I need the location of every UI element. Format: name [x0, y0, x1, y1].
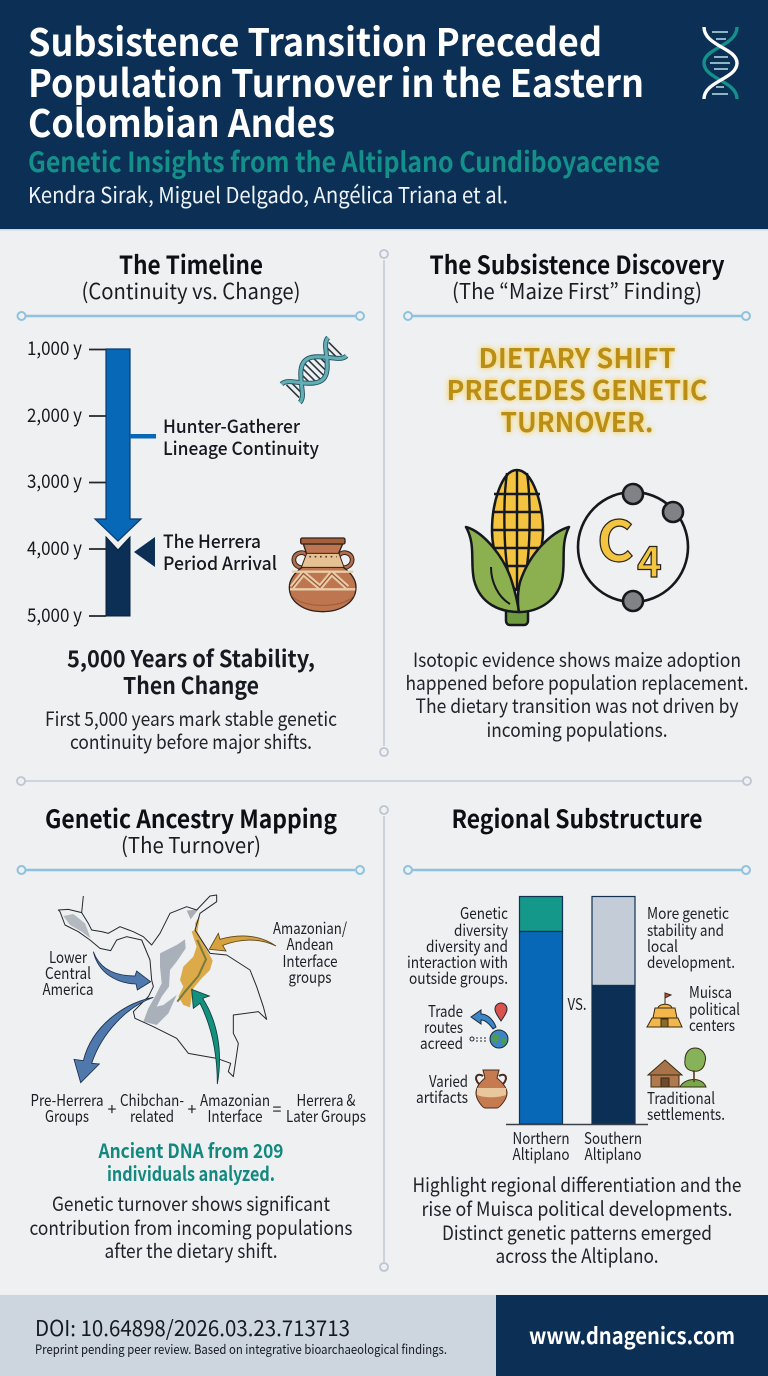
callout: dietary shift: DIETARY SHIFT — [478, 337, 676, 376]
label: varied artifacts — [416, 1068, 468, 1108]
heading: The Subsistence Discovery: The Subsistence Discovery — [430, 246, 725, 282]
preprint note: Preprint pending peer review. Based on integrative bioarchaeological findings. — [35, 1339, 447, 1358]
arrow: Amazonian inflow — [192, 989, 220, 1084]
summary heading: Then Change — [123, 667, 259, 701]
label: Hunter-Gatherer: Lineage Continuity — [163, 435, 319, 461]
label: vs: VS. — [568, 991, 586, 1015]
label: traditional settlements: Traditional — [647, 1085, 715, 1109]
axis labels: Southern — [584, 1125, 642, 1149]
title — [28, 12, 644, 148]
axis labels — [512, 1125, 642, 1165]
heading: Regional Substructure: Regional Substructure — [452, 800, 702, 836]
heading: The Subsistence Discovery — [404, 246, 750, 320]
bar: Herrera period — [106, 537, 130, 616]
title: Population Turnover in the Eastern — [28, 53, 644, 108]
body text — [30, 1188, 352, 1264]
ancestry equation: Herrera & — [296, 1087, 356, 1111]
arrow: continuity bar — [95, 349, 141, 541]
icon: settlement — [648, 1048, 706, 1087]
label: Lower Central America — [42, 944, 94, 1000]
label: Amazonian/Andean: Interface — [282, 948, 338, 972]
DOI: DOI: 10.64898/2026.03.23.713713 — [35, 1312, 350, 1343]
body text: continuity before major shifts. — [70, 726, 312, 755]
footer — [0, 1295, 768, 1376]
body text: First 5,000 years mark stable genetic — [45, 703, 337, 732]
arrow: Lower Central America inflow — [93, 952, 151, 990]
body text: across the Altiplano. — [496, 1240, 658, 1269]
label: Hunter-Gatherer: Hunter-Gatherer — [163, 413, 300, 439]
header banner — [0, 0, 768, 230]
body text — [45, 703, 337, 755]
callout: dietary shift — [446, 337, 708, 440]
arrow: Pre-Herrera outflow — [74, 997, 153, 1083]
timeline axis labels: 5,000 y — [27, 601, 82, 628]
label: Herrera — [163, 528, 277, 576]
label: Southern stability: development. — [647, 949, 735, 973]
label: trade routes: Trade — [428, 998, 463, 1022]
label: Southern stability: More genetic — [647, 900, 729, 924]
icon: DNA helix — [281, 337, 347, 403]
label: Lower Central America: Lower — [49, 944, 88, 968]
label: varied artifacts: Varied — [429, 1068, 468, 1092]
label: Amazonian/Andean: Amazonian/ — [273, 915, 348, 939]
heading: Regional Substructure — [404, 800, 750, 874]
label: trade routes: routes — [424, 1014, 463, 1038]
bar: Northern Altiplano — [520, 896, 562, 1124]
body text — [406, 644, 748, 743]
label: Northern diversity: interaction with — [407, 949, 508, 973]
ancestry equation: = — [273, 1096, 282, 1120]
label: Amazonian/Andean: Andean — [286, 931, 334, 955]
summary heading: 5,000 Years of Stability, — [67, 640, 315, 674]
label: Northern diversity: diversity — [454, 917, 509, 941]
body text: contribution from incoming populations — [30, 1212, 352, 1241]
label: Southern stability — [647, 900, 735, 973]
icon: trade routes — [470, 1003, 508, 1048]
heading: Genetic Ancestry Mapping: (The Turnover) — [121, 829, 261, 860]
icon: temple — [647, 993, 682, 1027]
label: Lower Central America: Central — [45, 960, 91, 984]
ancestry equation: related — [130, 1103, 174, 1127]
panel: genetic ancestry mapping — [18, 800, 366, 1264]
label: Northern diversity — [407, 900, 509, 989]
body text: Distinct genetic patterns emerged — [442, 1217, 712, 1246]
body text: rise of Muisca political developments. — [422, 1193, 732, 1222]
icon: pot — [289, 538, 356, 612]
label: Northern diversity: Genetic — [460, 900, 508, 924]
authors: Kendra Sirak, Miguel Delgado, Angélica Triana et al. — [28, 178, 508, 210]
panel: timeline — [18, 246, 364, 755]
ancestry equation: Chibchan- — [120, 1087, 184, 1111]
label: Southern stability: stability and — [647, 917, 724, 941]
arrow marker — [134, 537, 155, 567]
label: Northern diversity: diversity and — [426, 933, 508, 957]
ancestry equation: + — [188, 1096, 197, 1120]
label: traditional settlements — [647, 1085, 725, 1125]
heading: The Timeline: (Continuity vs. Change) — [82, 275, 300, 306]
label: trade routes: acreed — [420, 1030, 463, 1054]
label: Lower Central America: America — [42, 976, 94, 1000]
heading: The Timeline: The Timeline — [119, 246, 263, 282]
map: Colombia and Lower Central America — [58, 895, 276, 1084]
ancestry equation: Interface — [208, 1103, 263, 1127]
label: Amazonian/Andean: groups — [288, 964, 332, 988]
panel: regional substructure — [404, 800, 750, 1269]
icon: maize — [466, 470, 569, 625]
icon: C4 molecule: C — [597, 497, 634, 578]
label: Herrera: Period Arrival — [163, 550, 277, 576]
ancestry equation: + — [108, 1096, 117, 1120]
icon: amphora — [476, 1070, 507, 1108]
heading: Genetic Ancestry Mapping: Genetic Ancestry Mapping — [45, 800, 337, 836]
label: Hunter-Gatherer — [163, 413, 319, 461]
label: Herrera: The Herrera — [163, 528, 261, 554]
body text — [412, 1169, 742, 1269]
connector — [130, 434, 156, 438]
title: Colombian Andes — [28, 93, 335, 148]
heading: Genetic Ancestry Mapping — [18, 800, 364, 874]
ancestry equation: Pre-Herrera — [30, 1087, 104, 1111]
timeline axis labels: 4,000 y — [27, 534, 82, 561]
timeline axis labels: 1,000 y — [27, 334, 82, 361]
heading: The Timeline — [18, 246, 364, 320]
icon: header DNA — [704, 27, 737, 99]
callout: dietary shift: PRECEDES GENETIC — [446, 369, 708, 408]
arrow: Amazonian/Andean inflow — [209, 933, 276, 951]
ancestry equation — [30, 1087, 366, 1127]
heading: The Subsistence Discovery: (The “Maize First” Finding) — [452, 275, 702, 306]
title: Subsistence Transition Preceded — [28, 12, 602, 67]
callout: ancient DNA: Ancient DNA from 209 — [98, 1135, 284, 1164]
body text: incoming populations. — [486, 714, 668, 743]
axis labels: Altiplano — [584, 1141, 642, 1165]
body text: after the dietary shift. — [104, 1235, 278, 1264]
subtitle: Genetic Insights from the Altiplano Cundiboyacense — [28, 140, 660, 180]
callout: ancient DNA — [98, 1135, 284, 1187]
ancestry equation: Later Groups — [286, 1103, 366, 1127]
body text: Genetic turnover shows significant — [52, 1188, 331, 1217]
bar: Southern Altiplano — [592, 896, 635, 1124]
label: Southern stability: local — [647, 933, 678, 957]
icon: C4 molecule: 4 — [637, 529, 662, 590]
timeline axis labels: 3,000 y — [27, 467, 82, 494]
label: Muisca centers: political — [689, 996, 740, 1020]
label: Northern diversity: outside groups. — [409, 965, 508, 989]
label: traditional settlements: settlements. — [647, 1101, 725, 1125]
panel: subsistence discovery — [404, 246, 750, 743]
timeline axis labels — [27, 334, 106, 628]
label: Muisca centers: Muisca — [689, 979, 732, 1003]
label: varied artifacts: artifacts — [416, 1084, 468, 1108]
timeline axis labels: 2,000 y — [27, 401, 82, 428]
body text: The dietary transition was not driven by — [416, 690, 738, 719]
axis labels: Altiplano — [512, 1141, 570, 1165]
ancestry equation: Amazonian — [200, 1087, 270, 1111]
ancestry equation: Groups — [45, 1103, 89, 1127]
callout: dietary shift: TURNOVER. — [500, 401, 654, 440]
callout: ancient DNA: individuals analyzed. — [107, 1158, 275, 1187]
summary heading — [67, 640, 315, 701]
icon: C4 molecule — [578, 484, 688, 611]
label: Amazonian/Andean — [273, 915, 348, 988]
website: www.dnagenics.com — [529, 1319, 735, 1351]
label: trade routes — [420, 998, 463, 1054]
axis labels: Northern — [512, 1125, 570, 1149]
label: Muisca centers — [689, 979, 740, 1036]
label: Muisca centers: centers — [689, 1012, 735, 1036]
